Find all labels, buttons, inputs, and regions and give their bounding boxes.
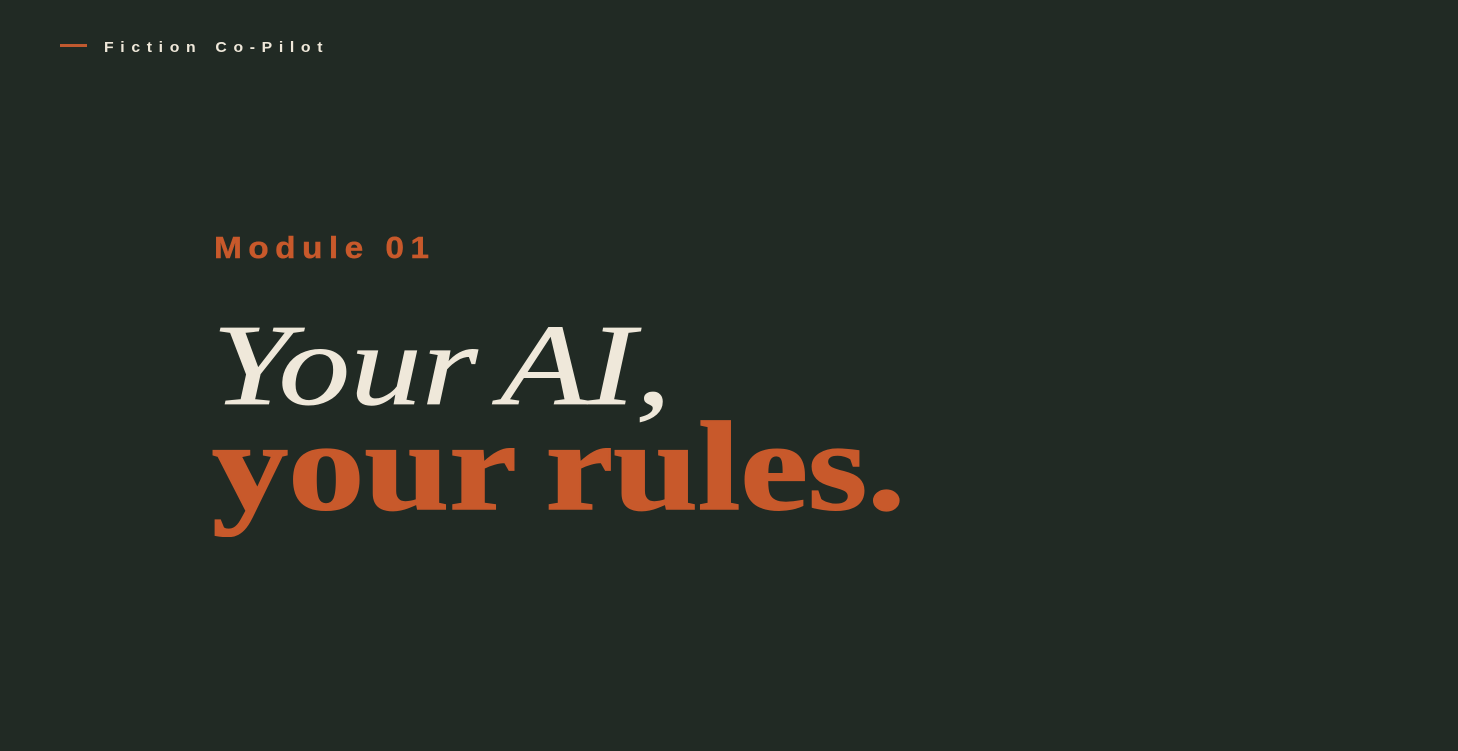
module label: Module 01 [214, 230, 435, 265]
brand label: Fiction Co-Pilot [104, 39, 329, 56]
headline line 1: Your AI, [212, 302, 671, 430]
headline line 2: your rules. [212, 397, 905, 537]
accent dash [60, 44, 87, 47]
